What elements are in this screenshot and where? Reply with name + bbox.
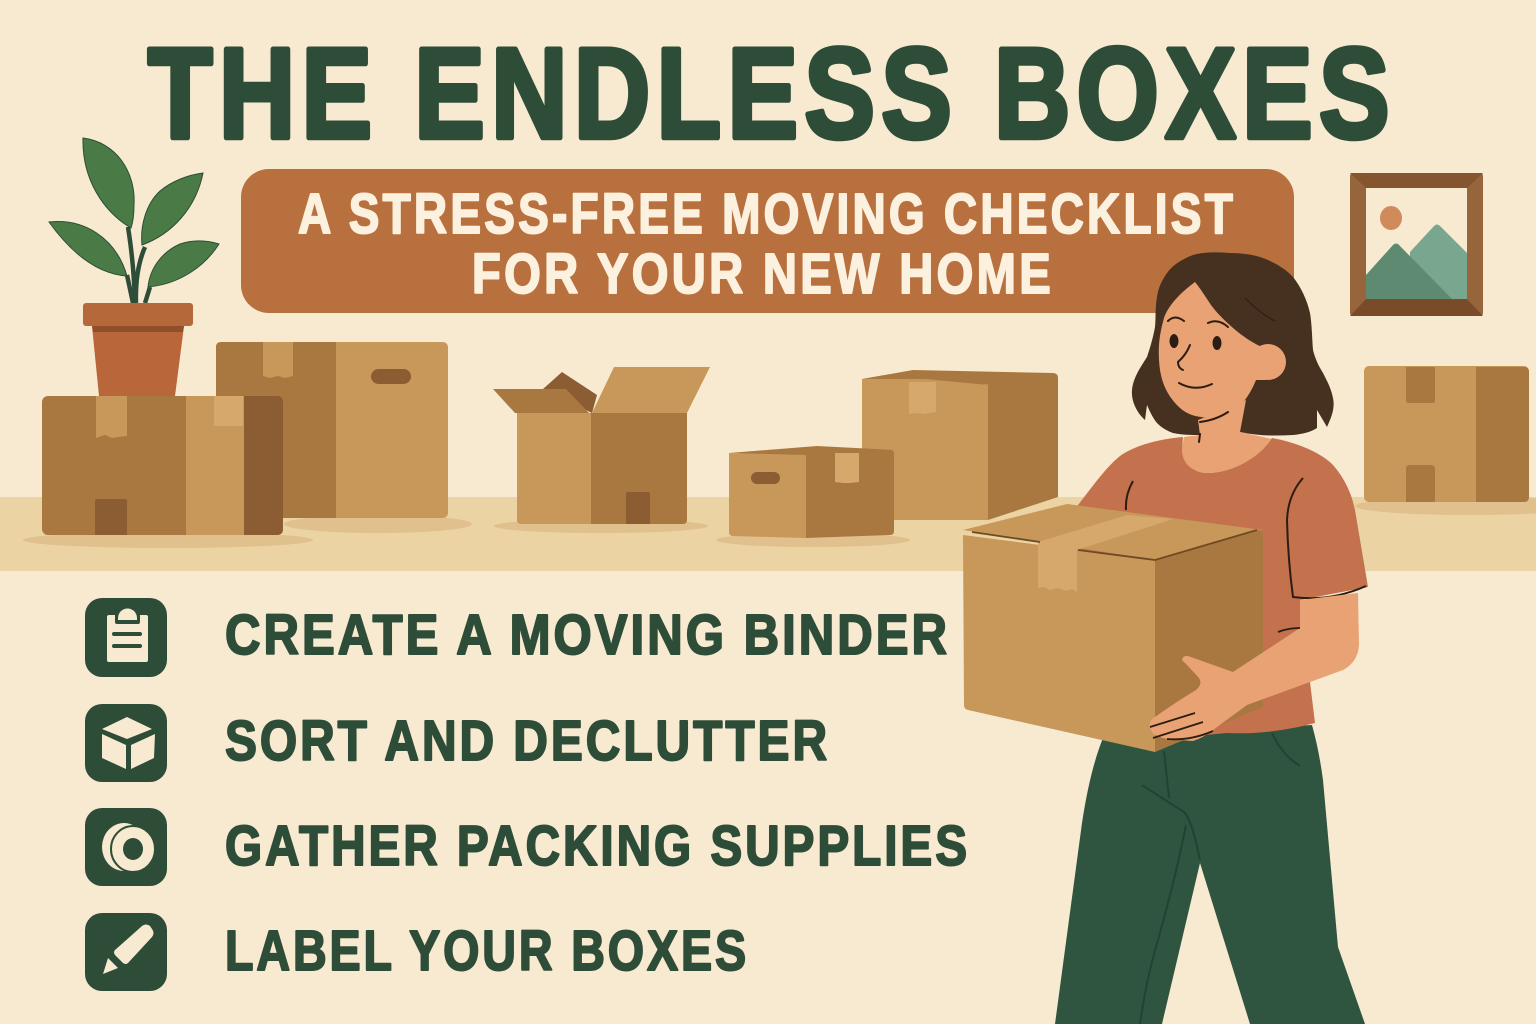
icon: box <box>85 704 167 782</box>
box: large back left <box>216 342 472 533</box>
subtitle banner <box>241 169 1294 313</box>
floor band <box>0 497 1536 571</box>
icon: marker <box>85 913 167 991</box>
box: far right <box>1355 366 1536 515</box>
hair strand <box>1245 298 1275 321</box>
picture frame <box>1350 173 1483 316</box>
subtitle line 1: A STRESS-FREE MOVING CHECKLIST <box>298 182 1236 246</box>
finger lines <box>1150 628 1300 739</box>
eyes <box>1170 334 1222 350</box>
plant leaves <box>49 138 219 287</box>
checklist item: sort and declutter <box>85 704 830 782</box>
box seams <box>972 530 1257 560</box>
facial lines <box>1168 318 1228 442</box>
item text: SORT AND DECLUTTER <box>225 709 830 773</box>
trousers <box>1055 725 1365 1024</box>
checklist item: gather packing supplies <box>85 808 970 886</box>
box: tall centre right <box>862 370 1058 520</box>
ear <box>1250 344 1286 380</box>
item text: CREATE A MOVING BINDER <box>225 603 950 667</box>
woman carrying box <box>963 252 1368 1024</box>
t-shirt <box>1000 437 1368 740</box>
arm and hand <box>1150 593 1359 741</box>
subtitle line 2: FOR YOUR NEW HOME <box>472 242 1054 306</box>
box: open flaps centre <box>493 367 710 533</box>
checklist <box>85 598 970 991</box>
checklist item: create a moving binder <box>85 598 950 677</box>
box: front left under plant <box>23 396 313 548</box>
box tape <box>1038 515 1173 592</box>
hair <box>1132 252 1334 436</box>
neck <box>1182 400 1272 473</box>
box: small centre <box>716 446 910 547</box>
item text: GATHER PACKING SUPPLIES <box>225 814 970 878</box>
shirt fold lines <box>1126 478 1366 598</box>
icon: tape roll <box>85 808 167 886</box>
head and face <box>1159 282 1286 442</box>
icon: clipboard <box>85 598 167 677</box>
carried cardboard box <box>963 504 1263 752</box>
flower pot <box>92 326 184 396</box>
potted plant <box>49 138 219 396</box>
item text: LABEL YOUR BOXES <box>225 919 749 983</box>
checklist item: label your boxes <box>85 913 749 991</box>
plant stems <box>127 227 150 303</box>
